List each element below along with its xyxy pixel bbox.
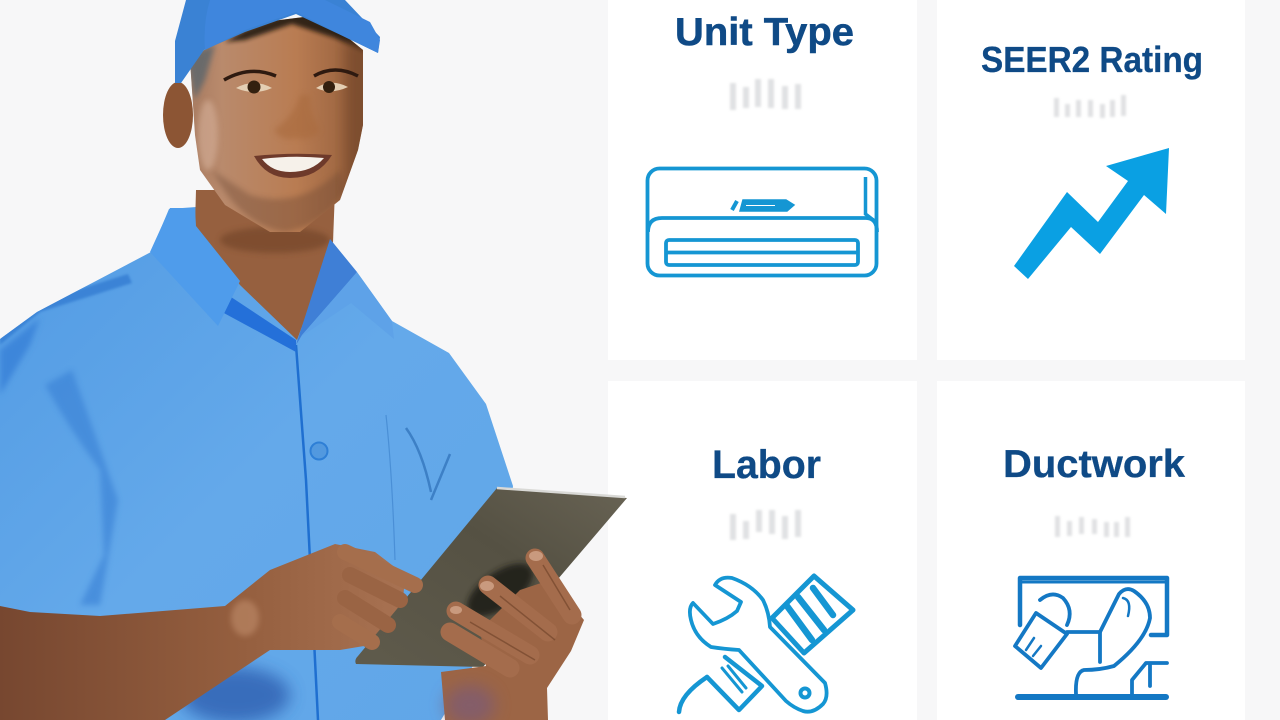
right shadow — [340, 38, 363, 198]
person: technician with tablet — [0, 0, 627, 720]
placeholder text bars — [730, 510, 801, 540]
heading: unit type: Unit Type — [675, 11, 854, 54]
placeholder text bars — [730, 79, 801, 110]
brows — [224, 70, 358, 80]
tablet shadow from hand — [459, 553, 541, 627]
neck — [195, 190, 335, 340]
mouth — [254, 154, 332, 178]
eyes — [236, 80, 348, 94]
placeholder text bars — [1054, 95, 1126, 118]
panel: SEER2 rating — [937, 0, 1245, 360]
collar right — [302, 272, 394, 339]
placket — [296, 345, 318, 720]
holding fingers — [450, 558, 572, 668]
tablet — [355, 488, 627, 667]
icon: wall air conditioner — [648, 168, 877, 276]
finger creases — [470, 565, 570, 660]
nose — [274, 95, 320, 139]
tablet edge — [497, 488, 625, 497]
shoulder seam — [0, 274, 132, 345]
placeholder text bars — [1055, 516, 1130, 537]
tapping fingers — [340, 552, 415, 642]
cap — [175, 0, 380, 83]
inner collar band left — [222, 295, 296, 352]
collar left — [150, 208, 240, 326]
panel: labor — [608, 381, 917, 720]
icon: rising arrow — [1014, 148, 1169, 279]
stubble — [212, 170, 345, 232]
icon: duct diagram — [1015, 578, 1167, 697]
holding hand — [441, 580, 584, 720]
fingertips — [450, 551, 543, 614]
sleeve fold shading — [45, 370, 118, 605]
cap brim — [205, 0, 380, 53]
ear — [163, 82, 193, 148]
pocket emblem — [406, 428, 450, 500]
face — [190, 17, 363, 232]
torso shading — [180, 667, 290, 720]
cap shadow on forehead — [224, 17, 363, 52]
shirt — [0, 200, 520, 720]
lower arm shadow — [445, 685, 495, 720]
heading: labor: Labor — [712, 443, 821, 487]
forearm — [0, 544, 405, 720]
icon: wrench and brush — [679, 576, 853, 712]
teeth — [262, 157, 324, 172]
heading: ductwork: Ductwork — [1003, 443, 1185, 486]
panel: ductwork — [937, 381, 1245, 720]
inner collar right — [296, 239, 357, 345]
cheek highlight — [198, 100, 218, 170]
sleeve dark yoke — [0, 320, 39, 392]
wrist highlight — [231, 600, 259, 636]
hair stubble side — [186, 45, 215, 100]
button — [310, 442, 328, 460]
panel: unit type — [608, 0, 917, 360]
heading: SEER2 rating: SEER2 Rating — [981, 39, 1203, 80]
pocket line — [386, 415, 395, 560]
